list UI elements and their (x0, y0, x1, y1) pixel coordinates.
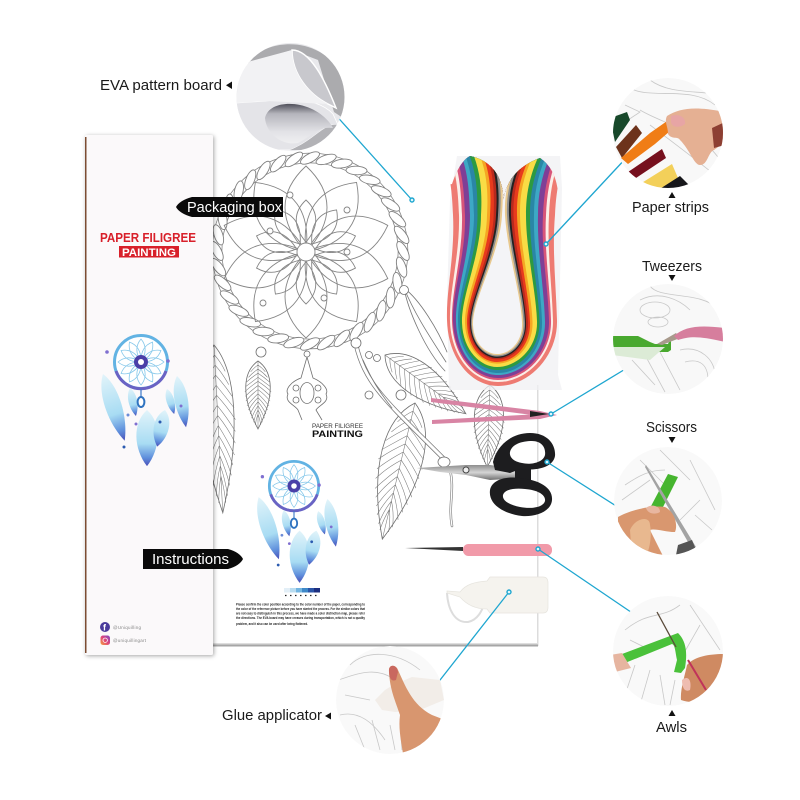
sheet title: PAINTING (312, 429, 363, 439)
social handles: @uniquillingart (113, 638, 147, 643)
scissors (417, 433, 555, 516)
instructions paragraph: the color of the reference picture before you have started the process. For the similar colors that (236, 607, 366, 611)
awl (405, 544, 552, 556)
label: scissors: Scissors (646, 419, 697, 436)
glue bottle (447, 577, 548, 622)
feathers (197, 341, 506, 544)
callout: EVA pattern board (236, 43, 346, 151)
sheet title: PAPER FILIGREE (312, 423, 364, 430)
social handles: @Uniquilling (113, 625, 141, 630)
sheet title (312, 423, 364, 439)
instructions paragraph (236, 602, 366, 626)
hanging cords (356, 288, 452, 526)
label: instructions (143, 549, 243, 569)
paper strips bundle (446, 156, 562, 390)
box title (100, 231, 196, 259)
label: glue applicator: Glue applicator (222, 707, 322, 724)
box title: PAPER FILIGREE (100, 231, 196, 245)
label: instructions: Instructions (152, 551, 229, 568)
box title: PAINTING (122, 247, 176, 259)
callout: tweezers (612, 284, 725, 394)
label: paper strips (632, 192, 709, 216)
connector lines (331, 110, 650, 689)
line art: big dream catcher (197, 149, 506, 544)
box dream catcher (95, 336, 193, 466)
label: scissors (646, 419, 697, 443)
panel: instruction sheet (213, 150, 538, 646)
instructions paragraph: Please confirm the color position according to the color number of the paper, corresponding to (236, 602, 365, 606)
label: awls (656, 710, 687, 736)
colour key bar (284, 588, 320, 596)
callout: awls (613, 604, 723, 706)
label: paper strips: Paper strips (632, 199, 709, 216)
dream catcher ring with rope (208, 149, 412, 353)
dream catcher web (218, 166, 394, 338)
sheet colour dream catcher (251, 461, 342, 583)
callout: paper strips (613, 80, 723, 188)
coloured strips (446, 156, 558, 386)
tweezers (431, 398, 557, 424)
callout: glue applicator (336, 646, 445, 754)
label: tweezers: Tweezers (642, 258, 702, 275)
panel: packaging box (85, 135, 213, 655)
label: awls: Awls (656, 719, 687, 736)
clear packet (447, 156, 562, 390)
label: EVA pattern board: EVA pattern board (100, 77, 222, 94)
cord beads (256, 286, 450, 467)
social handles: f (103, 622, 107, 632)
instructions paragraph: the directions. The EVA board may have creases during transportation, which is not a quality (236, 616, 365, 620)
label: packaging box: Packaging box (187, 199, 282, 216)
callout: scissors (614, 450, 716, 555)
pendant (287, 351, 327, 420)
instructions paragraph: problem, and it also can be used after being flattened. (236, 622, 308, 626)
instructions paragraph: are not easy to distinguish in this process, we have made a color distinction map, please refer (236, 612, 366, 616)
social handles (100, 622, 147, 645)
